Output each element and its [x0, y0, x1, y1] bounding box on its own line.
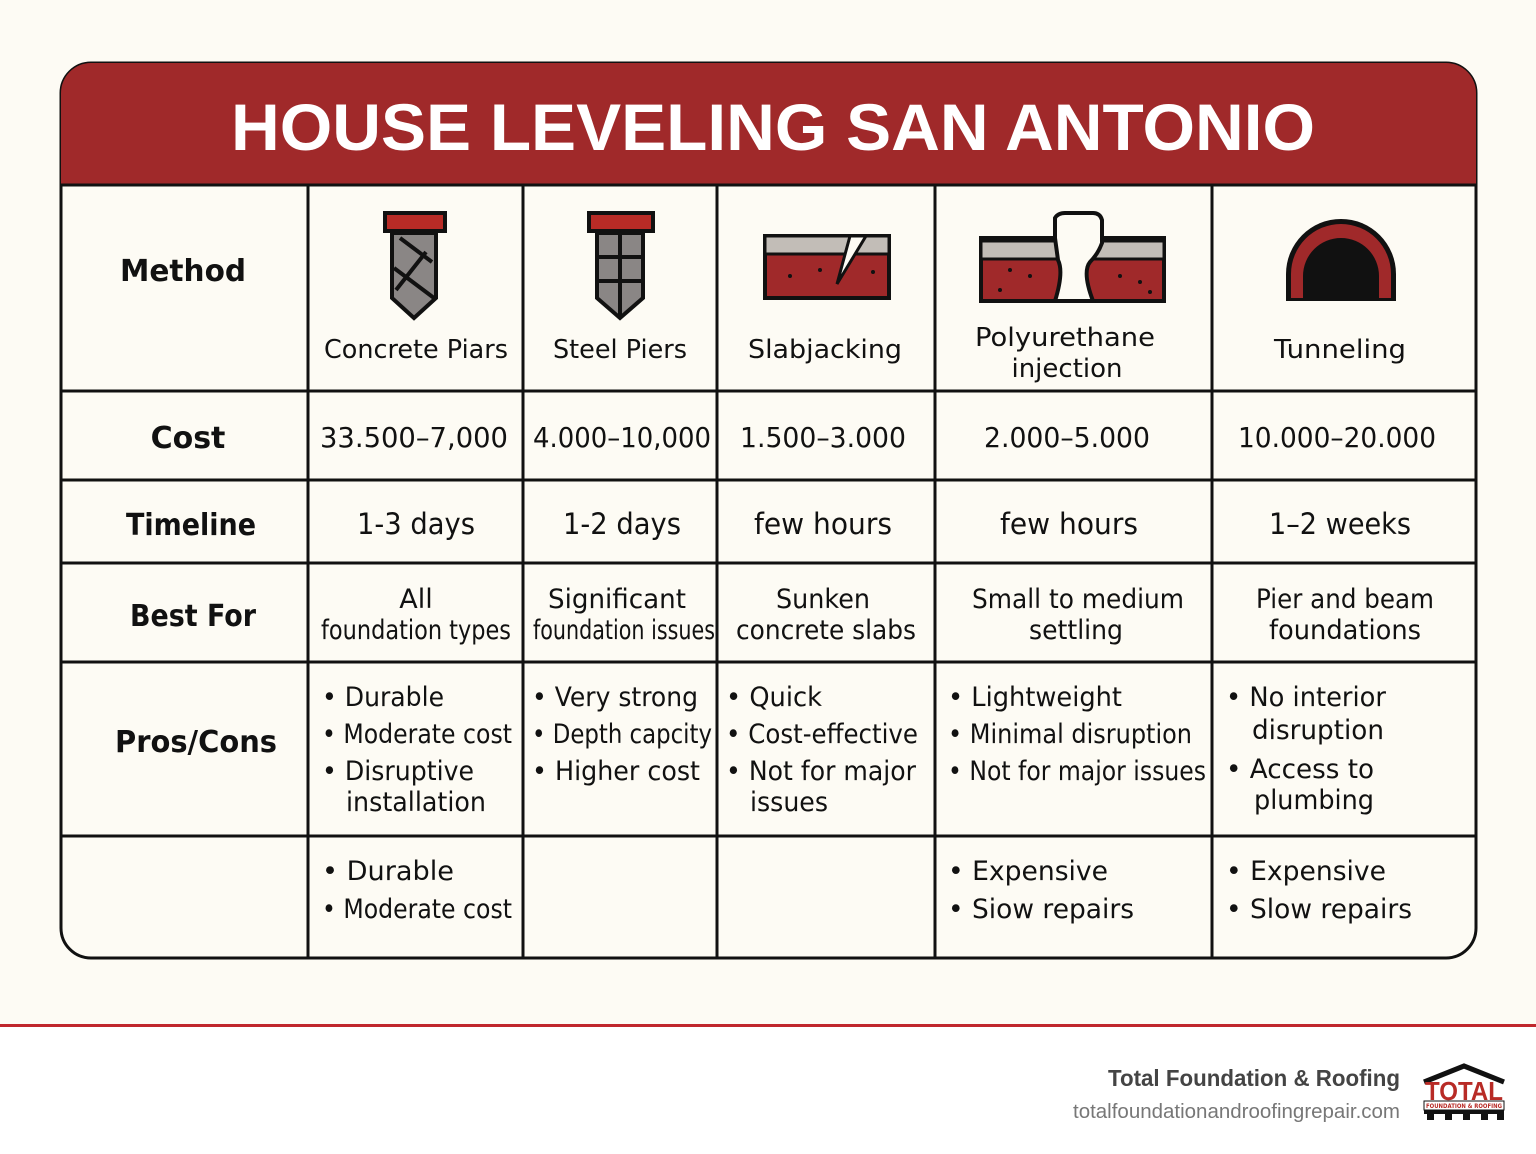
- pros list: • Lightweight: [948, 682, 1122, 713]
- method names: Steel Piers: [553, 335, 687, 365]
- cons list: [322, 856, 1412, 925]
- logo: TOTAL: [1425, 1076, 1503, 1106]
- cons list: • Siow repairs: [948, 894, 1134, 925]
- pros list: • Access to: [1226, 754, 1374, 785]
- row labels: Timeline: [126, 508, 256, 543]
- cost row: 4.000–10,000: [533, 421, 711, 454]
- best for row: foundation types: [321, 615, 511, 646]
- logo: [1424, 1066, 1504, 1120]
- pros list: • Depth capcity: [532, 719, 712, 750]
- method names: [324, 323, 1406, 384]
- row labels: [115, 254, 277, 760]
- pros list: • Quick: [726, 682, 822, 713]
- pros list: plumbing: [1254, 785, 1374, 816]
- best for row: Significant: [548, 584, 686, 615]
- timeline row: few hours: [754, 507, 892, 541]
- icon: steel pier: [589, 213, 653, 318]
- pros list: • Higher cost: [532, 756, 700, 787]
- pros list: • Moderate cost: [322, 719, 512, 750]
- pros list: • Not for major issues: [948, 756, 1206, 787]
- best for row: foundations: [1269, 615, 1421, 646]
- timeline row: few hours: [1000, 507, 1138, 541]
- cons list: • Expensive: [948, 856, 1108, 887]
- cost row: [320, 421, 1436, 454]
- footer divider: [0, 1024, 1536, 1027]
- pros list: • No interior: [1226, 682, 1387, 713]
- row labels: Pros/Cons: [115, 725, 277, 760]
- cost row: 10.000–20.000: [1238, 421, 1436, 454]
- pros list: • Cost-effective: [726, 719, 918, 750]
- cons list: • Durable: [322, 856, 454, 887]
- footer brand text: [1073, 1065, 1400, 1123]
- pros list: installation: [346, 787, 486, 818]
- best for row: Small to medium: [972, 584, 1184, 615]
- method names: Tunneling: [1273, 335, 1406, 365]
- pros list: [322, 682, 1387, 818]
- footer brand text: Total Foundation & Roofing: [1108, 1065, 1400, 1091]
- row labels: Cost: [151, 421, 225, 456]
- best for row: Pier and beam: [1256, 584, 1434, 615]
- pros list: issues: [750, 787, 828, 818]
- cons list: • Moderate cost: [322, 894, 512, 925]
- cost row: 1.500–3.000: [740, 421, 906, 454]
- table panel: [61, 63, 1476, 958]
- row labels: Method: [120, 254, 246, 289]
- pros list: • Minimal disruption: [948, 719, 1192, 750]
- best for row: [321, 584, 1434, 646]
- method names: Slabjacking: [748, 335, 902, 365]
- best for row: concrete slabs: [736, 615, 916, 646]
- cost row: 33.500–7,000: [320, 421, 508, 454]
- pros list: disruption: [1252, 715, 1384, 746]
- logo: FOUNDATION & ROOFING: [1426, 1103, 1502, 1110]
- icon: tunnel: [1286, 219, 1396, 301]
- timeline row: [357, 507, 1411, 541]
- row labels: Best For: [130, 599, 256, 634]
- method names: Concrete Piars: [324, 335, 508, 365]
- best for row: All: [399, 584, 433, 615]
- icon: concrete pier: [385, 213, 445, 318]
- cost row: 2.000–5.000: [984, 421, 1150, 454]
- cons list: • Slow repairs: [1226, 894, 1412, 925]
- pros list: • Durable: [322, 682, 444, 713]
- best for row: Sunken: [776, 584, 870, 615]
- timeline row: 1-3 days: [357, 507, 475, 541]
- pros list: • Very strong: [532, 682, 698, 713]
- icon: slabjacking: [765, 236, 889, 298]
- timeline row: 1–2 weeks: [1269, 507, 1411, 541]
- timeline row: 1-2 days: [563, 507, 681, 541]
- icon: polyurethane injection: [981, 213, 1164, 301]
- footer brand text: totalfoundationandroofingrepair.com: [1073, 1101, 1400, 1123]
- pros list: • Disruptive: [322, 756, 474, 787]
- method names: Polyurethane: [975, 323, 1155, 353]
- pros list: • Not for major: [726, 756, 917, 787]
- best for row: foundation issues: [533, 615, 715, 646]
- method names: injection: [1011, 354, 1123, 384]
- best for row: settling: [1029, 615, 1123, 646]
- title: HOUSE LEVELING SAN ANTONIO: [231, 90, 1315, 164]
- cons list: • Expensive: [1226, 856, 1386, 887]
